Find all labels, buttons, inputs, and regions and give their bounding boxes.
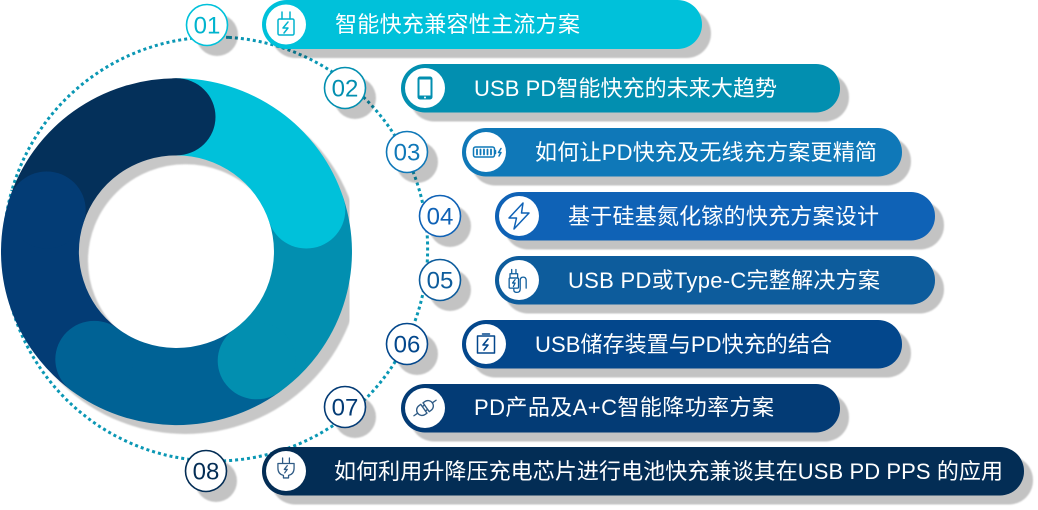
item 02 <box>324 64 849 122</box>
item 03: 如何让PD快充及无线充方案更精简 <box>535 140 877 165</box>
item 01 <box>186 0 711 58</box>
item 04: 基于硅基氮化镓的快充方案设计 <box>568 204 879 229</box>
item 06 <box>386 320 911 378</box>
item 07: PD产品及A+C智能降功率方案 <box>474 395 774 420</box>
item 03: 03 <box>394 140 420 166</box>
item 08: 如何利用升降压充电芯片进行电池快充兼谈其在USB PD PPS 的应用 <box>334 459 1003 484</box>
item 05: 05 <box>427 268 453 294</box>
item 08 <box>186 447 1033 504</box>
item 02: 02 <box>332 76 358 102</box>
item 05: USB PD或Type-C完整解决方案 <box>568 268 880 293</box>
item 06: USB储存装置与PD快充的结合 <box>535 332 832 357</box>
item 08: 08 <box>193 458 219 486</box>
dotted connector arc <box>4 37 428 461</box>
item 06: 06 <box>394 332 420 358</box>
donut chart <box>8 78 345 399</box>
item 01: 01 <box>194 12 220 40</box>
item 07 <box>324 384 849 442</box>
item 01: 智能快充兼容性主流方案 <box>335 12 580 37</box>
item 04: 04 <box>427 204 453 230</box>
item 07: 07 <box>332 394 358 422</box>
item 02: USB PD智能快充的未来大趋势 <box>474 76 777 101</box>
item 04 <box>420 192 944 250</box>
item 05 <box>420 256 944 314</box>
item 03 <box>386 128 911 186</box>
